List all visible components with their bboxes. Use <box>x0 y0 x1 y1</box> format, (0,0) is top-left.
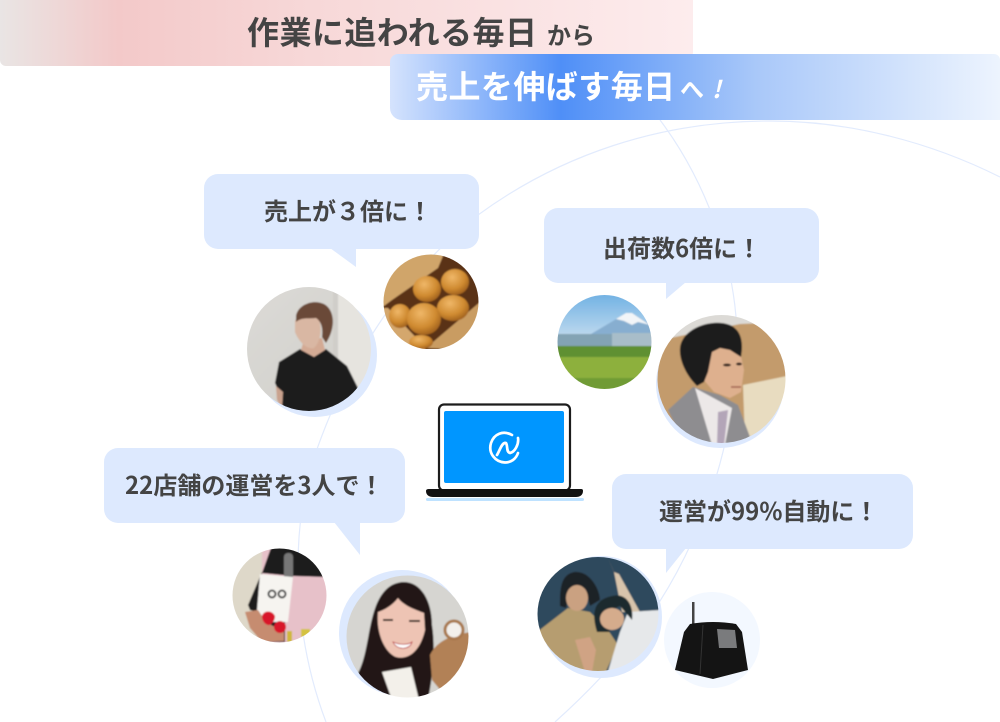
banner: from: から <box>547 16 595 51</box>
speech bubble: 99% automated: 運営が99%自動に！ <box>659 492 878 527</box>
photo: two men in hats <box>538 556 662 678</box>
speech bubble: sales tripled: 売上が３倍に！ <box>264 192 432 227</box>
photo: onions in box <box>384 254 478 349</box>
banner: to <box>390 54 1000 120</box>
banner: from: 作業に追われる毎日 <box>247 8 537 54</box>
photo: plush toy held in hand <box>232 548 326 642</box>
speech bubble: 22 stores: 22店舗の運営を3人で！ <box>125 466 383 501</box>
photo: woman in black shirt <box>247 287 377 417</box>
speech bubble: 99% automated <box>612 474 913 573</box>
banner: to: 売上を伸ばす毎日 <box>416 62 676 108</box>
photo: Mt Fuji and tea field <box>558 295 652 389</box>
photo: black dome device <box>664 592 760 688</box>
laptop with logo <box>426 403 584 501</box>
icon: logo mark <box>490 433 518 462</box>
speech bubble: sales tripled <box>204 174 479 267</box>
banner: to: ! <box>712 70 723 105</box>
banner: to: へ <box>680 70 704 105</box>
banner: from <box>0 0 693 66</box>
speech bubble: shipments 6x <box>544 208 819 299</box>
speech bubble: 22 stores <box>104 448 405 555</box>
speech bubble: shipments 6x: 出荷数6倍に！ <box>603 229 761 264</box>
photo: smiling woman with plush <box>339 570 468 698</box>
photo: man in grey suit <box>656 315 786 448</box>
